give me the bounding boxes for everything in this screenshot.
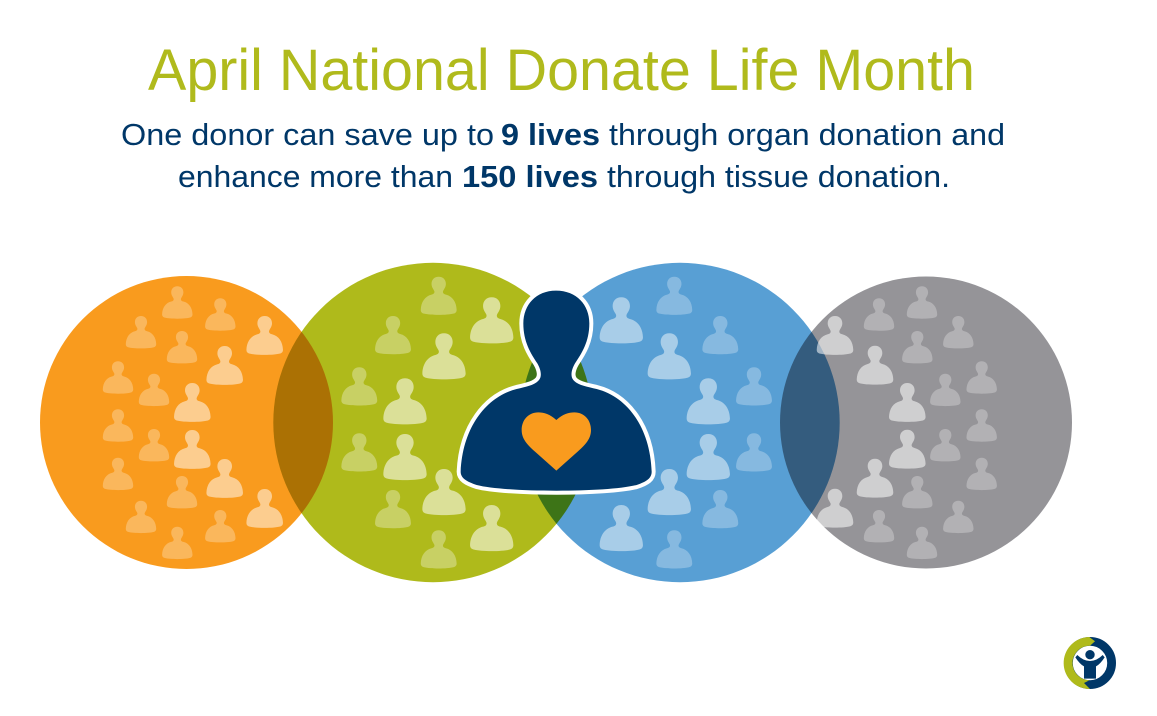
subtitle: One donor can save up to <box>121 117 494 152</box>
green circle <box>273 263 593 582</box>
people in gray circle <box>817 286 997 559</box>
subtitle: 150 lives <box>462 159 598 194</box>
icon: heart <box>522 412 591 471</box>
icon: logo <box>1064 637 1112 689</box>
gray circle <box>780 276 1072 568</box>
subtitle: 9 lives <box>501 117 600 152</box>
blue circle <box>520 263 840 582</box>
overlapping circles <box>40 263 1072 582</box>
subtitle: through tissue donation. <box>607 159 950 194</box>
subtitle: enhance more than <box>178 159 453 194</box>
central donor figure with heart <box>461 291 652 491</box>
people in blue circle <box>600 277 772 569</box>
people in orange circle <box>103 286 283 559</box>
subtitle: through organ donation and <box>609 117 1005 152</box>
orange circle <box>40 276 333 569</box>
subtitle <box>121 117 1005 194</box>
people in green circle <box>341 277 513 569</box>
donor silhouette <box>461 291 652 491</box>
title: April National Donate Life Month <box>148 38 975 103</box>
